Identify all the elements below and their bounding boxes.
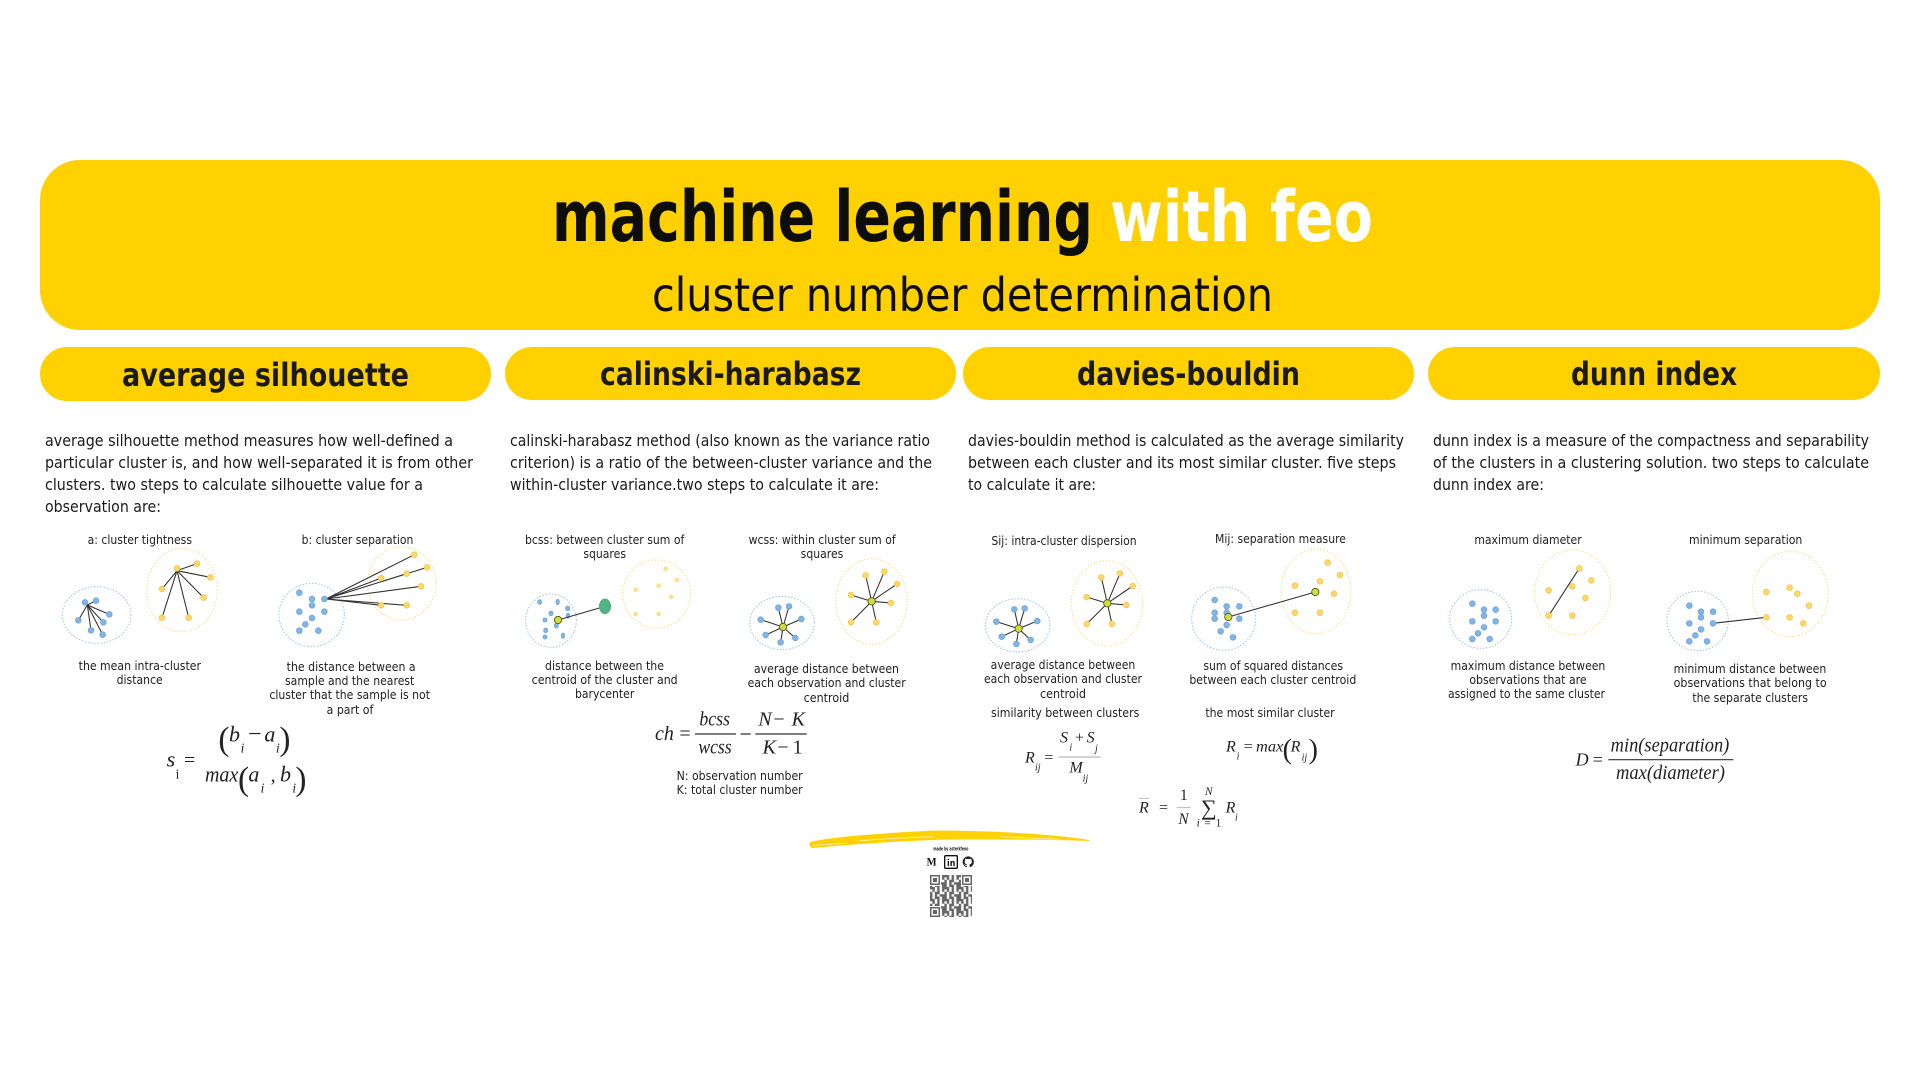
diagram: wcss: each observation and cluster [748, 676, 906, 690]
icon: github [963, 856, 974, 867]
diagram: minimum separation [1667, 533, 1828, 705]
description: observation are: [45, 497, 161, 516]
diagram b: cluster separation: a part of [327, 703, 374, 717]
formula: ch: = [679, 723, 691, 745]
heading pill: average silhouette [40, 347, 491, 401]
formula: silhouette: i [176, 766, 180, 781]
diagram a: cluster tightness [62, 533, 217, 687]
diagram: wcss [748, 533, 907, 705]
description: average silhouette method measures how well-defined a [45, 431, 453, 450]
icon: linkedin [945, 856, 957, 869]
formula: dunn: max(diameter) [1616, 762, 1725, 784]
formula: mean of R: = [1159, 800, 1168, 817]
diagrams and formula [525, 533, 907, 797]
formula: silhouette: b [229, 722, 240, 747]
diagrams and formula [1448, 533, 1828, 784]
diagram: minimum separation: the separate clusters [1692, 691, 1808, 705]
description [968, 431, 1404, 494]
QR code [930, 875, 972, 917]
diagram b: cluster separation [269, 533, 436, 717]
diagrams and formulas [984, 532, 1356, 830]
formula: silhouette: max [205, 762, 239, 787]
diagram: Sij: Sij: intra-cluster dispersion [991, 534, 1137, 548]
formula: silhouette: s [167, 747, 175, 772]
diagram: maximum diameter [1448, 533, 1611, 701]
description: clusters. two steps to calculate silhouette value for a [45, 475, 423, 494]
description: of the clusters in a clustering solution. two steps to calculate [1433, 453, 1869, 472]
formula: mean of R: R [1225, 800, 1236, 817]
diagram: bcss: squares [583, 547, 626, 561]
heading pill: davies-bouldin: davies-bouldin [1077, 355, 1300, 393]
diagram b: cluster separation: sample and the nearest [285, 674, 415, 688]
formula: ch: K [791, 709, 807, 731]
formula: ch: − [777, 736, 789, 758]
diagram: bcss: centroid of the cluster and [532, 673, 678, 687]
diagram: maximum diameter: maximum distance between [1451, 659, 1605, 673]
diagram a: cluster tightness: a: cluster tightness [88, 533, 192, 547]
formula: silhouette: a [248, 762, 259, 787]
formula: silhouette [167, 721, 306, 798]
formula: the most similar cluster: R [1225, 739, 1236, 756]
formula: similarity between clusters: ij [1083, 774, 1088, 785]
diagram: wcss: squares [801, 547, 843, 561]
diagram: Sij [984, 534, 1143, 701]
formula: mean of R: = [1204, 818, 1211, 830]
formula: similarity between clusters: S [1087, 730, 1095, 747]
credit text: made by asterkfeno [933, 847, 969, 853]
diagrams and formula [62, 533, 436, 798]
formula: silhouette: ) [279, 721, 290, 758]
formula: dunn: D [1575, 750, 1589, 770]
formula: silhouette: ( [218, 721, 229, 758]
panel: calinski-harabasz [505, 347, 956, 797]
description: within-cluster variance.two steps to calculate it are: [510, 475, 879, 494]
diagram: Sij: each observation and cluster [984, 672, 1142, 686]
diagram: bcss: barycenter [575, 687, 634, 701]
legend: N and K [677, 769, 803, 797]
formula: ch [655, 709, 807, 758]
formula: ch: N [757, 709, 773, 731]
description: calinski-harabasz method (also known as the variance ratio [510, 431, 930, 450]
heading pill: dunn index [1428, 347, 1880, 400]
description: davies-bouldin method is calculated as the average similarity [968, 431, 1404, 450]
formula: similarity between clusters [991, 706, 1139, 785]
footer [810, 831, 1089, 917]
formula: the most similar cluster [1205, 706, 1335, 765]
icon: medium: M [927, 856, 937, 868]
formula: ch: 1 [793, 736, 803, 758]
formula: silhouette: , [271, 765, 276, 787]
formula: ch: − [773, 709, 785, 731]
formula: silhouette: i [241, 740, 245, 755]
brush stroke [810, 831, 1089, 848]
diagram: Sij: centroid [1040, 687, 1086, 701]
legend: N and K: N: observation number [677, 769, 803, 783]
description: to calculate it are: [968, 475, 1096, 494]
formula: similarity between clusters: R [1024, 749, 1035, 766]
formula: dunn: min(separation) [1611, 735, 1730, 757]
diagram: bcss: distance between the [545, 659, 664, 673]
formula: ch: ch [655, 723, 674, 745]
formula: ch: bcss [699, 709, 730, 731]
formula: similarity between clusters: i [1069, 743, 1072, 754]
diagram: minimum separation: minimum separation [1689, 533, 1802, 547]
diagram: minimum separation: observations that belong to [1674, 676, 1827, 690]
diagram: wcss: centroid [804, 691, 849, 705]
formula: silhouette: a [264, 722, 275, 747]
subtitle: cluster number determination [652, 268, 1273, 322]
formula: ch: wcss [698, 736, 732, 758]
diagram: Mij: sum of squared distances [1203, 659, 1343, 673]
formula: the most similar cluster: max [1256, 739, 1283, 756]
icon: linkedin: in [947, 859, 955, 869]
diagram a: cluster tightness: the mean intra-cluster [79, 659, 201, 673]
diagram: wcss: wcss: within cluster sum of [749, 533, 896, 547]
formula: similarity between clusters: S [1060, 730, 1068, 747]
diagram: Mij: between each cluster centroid [1189, 673, 1356, 687]
formula: silhouette: i [261, 781, 265, 796]
description [1433, 431, 1869, 494]
diagram: bcss: bcss: between cluster sum of [525, 533, 685, 547]
formula: the most similar cluster: i [1237, 751, 1240, 762]
diagram: bcss [525, 533, 691, 701]
diagram b: cluster separation: cluster that the sample is not [269, 688, 430, 702]
diagram b: cluster separation: the distance between a [287, 660, 416, 674]
description [45, 431, 473, 516]
formula: the most similar cluster: R [1290, 739, 1301, 756]
formula: mean of R: N [1177, 811, 1189, 828]
formula: similarity between clusters: M [1068, 760, 1084, 777]
formula: the most similar cluster: ( [1283, 734, 1292, 765]
formula: the most similar cluster: the most similar cluster [1205, 706, 1335, 720]
diagram: wcss: average distance between [754, 662, 899, 676]
formula: similarity between clusters: j [1093, 744, 1098, 755]
title banner [40, 160, 1880, 330]
formula: dunn: = [1593, 750, 1603, 770]
formula: similarity between clusters: + [1075, 730, 1084, 747]
formula: the most similar cluster: = [1244, 739, 1253, 756]
legend: N and K: K: total cluster number [677, 783, 803, 797]
formula: silhouette: ) [295, 761, 306, 798]
diagram: Mij [1189, 532, 1356, 687]
diagram b: cluster separation: b: cluster separation [302, 533, 413, 547]
title: machine learning [552, 176, 1093, 258]
diagram a: cluster tightness: distance [117, 673, 163, 687]
diagram: maximum diameter: assigned to the same cluster [1448, 687, 1605, 701]
formula: mean of R: i [1235, 813, 1238, 824]
diagram: Sij: average distance between [991, 658, 1135, 672]
title: with feo [1110, 176, 1373, 258]
formula: similarity between clusters: = [1044, 749, 1053, 766]
formula: silhouette: − [248, 722, 262, 748]
formula: mean of R: R [1138, 800, 1149, 817]
heading pill: calinski-harabasz: calinski-harabasz [600, 355, 861, 393]
description: criterion) is a ratio of the between-cluster variance and the [510, 453, 932, 472]
panel: dunn index [1428, 347, 1880, 784]
formula: similarity between clusters: similarity between clusters [991, 706, 1139, 720]
formula: mean of R: 1 [1216, 818, 1221, 830]
diagram: minimum separation: minimum distance between [1674, 662, 1826, 676]
diagram: Mij: Mij: separation measure [1215, 532, 1346, 546]
description [510, 431, 932, 494]
panel: average silhouette [40, 347, 491, 798]
description: particular cluster is, and how well-separated it is from other [45, 453, 473, 472]
heading pill: davies-bouldin [963, 347, 1414, 400]
diagram: maximum diameter: maximum diameter [1474, 533, 1582, 547]
formula: silhouette: = [184, 750, 195, 772]
description: dunn index are: [1433, 475, 1544, 494]
diagram: maximum diameter: observations that are [1469, 673, 1587, 687]
formula: dunn [1575, 735, 1733, 784]
formula: mean of R: N [1204, 786, 1214, 798]
formula: silhouette: i [276, 740, 280, 755]
formula: mean of R: i [1197, 818, 1200, 830]
formula: the most similar cluster: ij [1302, 753, 1307, 764]
description: dunn index is a measure of the compactness and separability [1433, 431, 1869, 450]
formula: mean of R: 1 [1180, 787, 1188, 804]
formula: the most similar cluster: ) [1309, 734, 1318, 765]
formula: mean of R [1138, 786, 1238, 830]
formula: silhouette: ( [238, 761, 249, 798]
formula: silhouette: b [280, 762, 291, 787]
heading pill: average silhouette: average silhouette [122, 356, 409, 394]
formula: similarity between clusters: ij [1035, 763, 1041, 774]
panel: davies-bouldin [963, 347, 1414, 830]
heading pill: calinski-harabasz [505, 347, 956, 400]
description: between each cluster and its most similar cluster. five steps [968, 453, 1396, 472]
heading pill: dunn index: dunn index [1571, 355, 1737, 393]
formula: ch: K [762, 736, 778, 758]
formula: mean of R: ∑ [1201, 795, 1217, 820]
formula: silhouette: i [292, 781, 296, 796]
